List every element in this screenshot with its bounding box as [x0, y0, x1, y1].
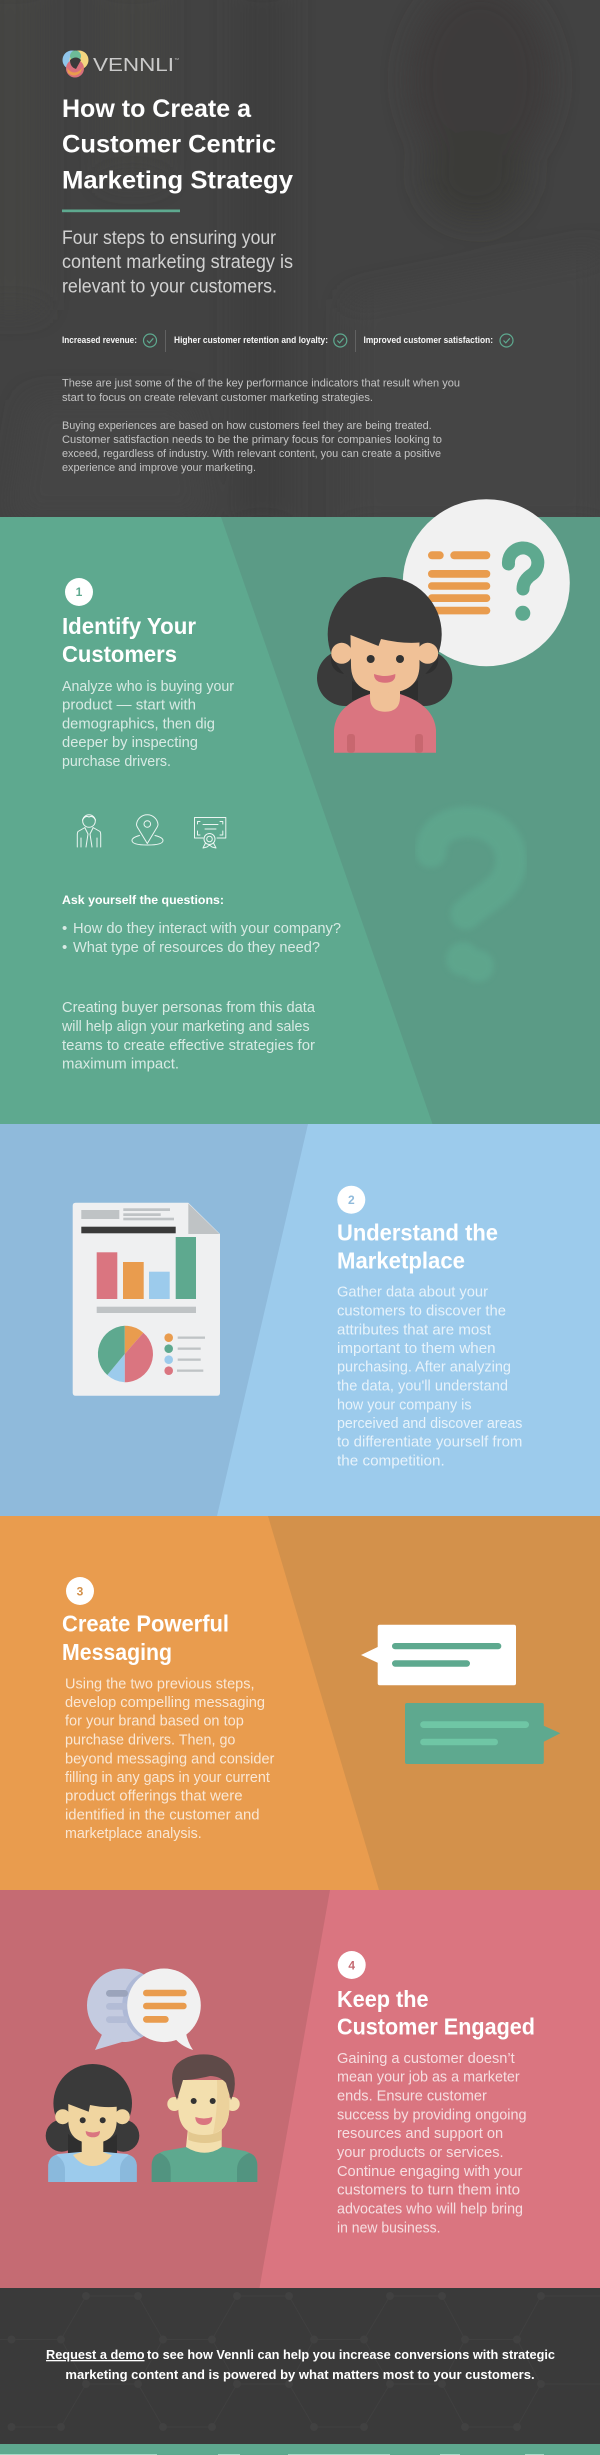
- text: step 2 description: perceived and discover areas: [337, 1415, 522, 1432]
- text: step 4 description: success by providing ongoing: [337, 2106, 527, 2124]
- icon: person: [77, 815, 101, 847]
- text: step 3 description: [65, 1675, 274, 1842]
- text: step 2 description: important to them when: [337, 1340, 496, 1357]
- text: ask yourself the questions: •: [62, 939, 67, 956]
- subtitle: [62, 228, 293, 298]
- KPI row: [62, 330, 513, 352]
- text: step 3 description: filling in any gaps in your current: [65, 1769, 271, 1786]
- text: step 2 description: to differentiate yourself from: [337, 1434, 522, 1451]
- title: Marketing Strategy: [62, 167, 293, 195]
- heading: identify your customers: [62, 613, 196, 667]
- text: step 1 description: purchase drivers.: [62, 753, 171, 770]
- logo: Vennli: VENNLI: [93, 55, 174, 75]
- illustration: back speech bubble: [87, 1968, 144, 2050]
- text: step 2 description: [337, 1284, 522, 1469]
- heading: create powerful messaging: Create Powerful: [62, 1611, 229, 1637]
- text: buyer personas: [61, 999, 316, 1073]
- heading: understand the marketplace: Understand the: [337, 1220, 498, 1246]
- text: step 1 description: product — start with: [62, 697, 196, 714]
- icon: ghost question mark: [431, 822, 511, 982]
- text: step 3 description: for your brand based on top: [65, 1713, 244, 1730]
- heading: identify your customers: Identify Your: [62, 613, 196, 639]
- subtitle: relevant to your customers.: [62, 277, 277, 298]
- intro text: Customer satisfaction needs to be the primary focus for companies looking to: [62, 434, 442, 446]
- call to action text: marketing content and is powered by what matters most to your customers.: [65, 2367, 535, 2382]
- text: step 2 description: the data, you'll understand: [337, 1377, 508, 1394]
- panel: step 4 keep the customer engaged: [0, 1890, 600, 2288]
- panel: step 2 understand the marketplace: [0, 1124, 600, 1516]
- intro text: experience and improve your marketing.: [62, 462, 256, 474]
- icon: check: [500, 334, 513, 347]
- icon: certificate: [194, 818, 226, 848]
- text: step 3 description: Using the two previous steps,: [65, 1675, 254, 1692]
- text: step 2 description: Gather data about your: [337, 1284, 488, 1301]
- step number 2: [337, 1186, 365, 1214]
- subtitle: Four steps to ensuring your: [62, 228, 277, 249]
- text: step 4 description: your products or services.: [337, 2144, 504, 2161]
- call to action text: Request a demo: [46, 2347, 145, 2362]
- text: step 3 description: develop compelling messaging: [65, 1694, 265, 1711]
- illustration: woman: [46, 2064, 139, 2182]
- heading: keep the customer engaged: Customer Engaged: [337, 2014, 535, 2040]
- text: ask yourself the questions: How do they interact with your company?: [73, 920, 341, 937]
- icon: check: [334, 334, 347, 347]
- text: ask yourself the questions: Ask yourself the questions:: [62, 893, 224, 907]
- panel: step 1 identify your customers: [0, 499, 600, 1124]
- icon: white chat bubble: [361, 1625, 516, 1685]
- title: How to Create a: [62, 95, 252, 123]
- illustration: front speech bubble: [127, 1968, 201, 2050]
- intro text: These are just some of the of the key performance indicators that result when you: [62, 378, 460, 390]
- call to action text: [46, 2347, 555, 2382]
- illustration: man: [152, 2054, 257, 2182]
- text: step 3 description: identified in the customer and: [65, 1806, 260, 1823]
- icon: green chat bubble: [405, 1703, 560, 1764]
- KPI row: Higher customer retention and loyalty:: [174, 335, 328, 346]
- intro text: start to focus on create relevant customer marketing strategies.: [62, 392, 373, 404]
- step number 4: 4: [348, 1958, 355, 1972]
- text: ask yourself the questions: What type of resources do they need?: [73, 939, 320, 956]
- text: step 2 description: attributes that are most: [337, 1321, 492, 1338]
- icon: speech bubble with question: [403, 499, 570, 666]
- step number 1: 1: [76, 585, 83, 599]
- text: step 4 description: [337, 2050, 527, 2236]
- text: step 4 description: customers to turn them into: [337, 2182, 520, 2198]
- text: buyer personas: will help align your marketing and sales: [61, 1018, 310, 1035]
- text: step 1 description: [62, 678, 234, 770]
- bar chart: [97, 1237, 196, 1299]
- text: step 4 description: resources and support on: [337, 2125, 503, 2142]
- step number 1: [65, 578, 93, 606]
- intro text: exceed, regardless of industry. With relevant content, you can create a positive: [62, 448, 441, 460]
- illustration: report document: [73, 1203, 220, 1396]
- text: buyer personas: maximum impact.: [62, 1056, 179, 1073]
- text: step 4 description: in new business.: [337, 2219, 440, 2236]
- call to action text: to see how Vennli can help you increase conversions with strategic: [147, 2347, 555, 2362]
- text: ask yourself the questions: •: [62, 920, 67, 937]
- subtitle: content marketing strategy is: [62, 252, 293, 273]
- text: step 1 description: demographics, then dig: [62, 716, 215, 733]
- text: step 3 description: beyond messaging and consider: [65, 1750, 274, 1767]
- text: step 1 description: deeper by inspecting: [62, 734, 198, 751]
- heading: identify your customers: Customers: [62, 641, 177, 667]
- step number 3: [66, 1577, 94, 1605]
- panel: header: [0, 0, 600, 530]
- legend: [164, 1333, 173, 1375]
- heading: create powerful messaging: [62, 1611, 229, 1665]
- bottom green strip: [0, 2444, 600, 2455]
- text: step 4 description: ends. Ensure customer: [337, 2088, 487, 2105]
- illustration: woman: [317, 577, 452, 753]
- text: step 4 description: Continue engaging with your: [337, 2163, 522, 2180]
- intro text: [62, 378, 460, 474]
- text: step 4 description: mean your job as a marketer: [337, 2069, 520, 2086]
- heading: understand the marketplace: [337, 1220, 498, 1274]
- pie chart: [98, 1326, 153, 1382]
- heading: understand the marketplace: Marketplace: [337, 1248, 465, 1274]
- text: step 2 description: purchasing. After analyzing: [337, 1359, 511, 1376]
- text: step 2 description: how your company is: [337, 1396, 472, 1413]
- text: step 3 description: purchase drivers. Then, go: [65, 1731, 235, 1748]
- title: [62, 95, 293, 195]
- KPI row: Increased revenue:: [62, 335, 137, 346]
- step number 3: 3: [77, 1584, 84, 1598]
- step number 2: 2: [348, 1193, 355, 1207]
- logo: Vennli: TM: [174, 57, 179, 61]
- text: step 3 description: product offerings that were: [65, 1788, 243, 1805]
- text: step 4 description: advocates who will help bring: [337, 2200, 523, 2217]
- logo: Vennli: [62, 50, 179, 78]
- panel: step 3 create powerful messaging: [0, 1516, 600, 1890]
- icon: check: [144, 334, 156, 347]
- title: Customer Centric: [62, 131, 276, 159]
- KPI row: Improved customer satisfaction:: [364, 335, 493, 346]
- text: buyer personas: Creating buyer personas from this data: [62, 999, 316, 1016]
- panel: call to action footer: [0, 2288, 600, 2444]
- heading: create powerful messaging: Messaging: [62, 1639, 172, 1665]
- step number 4: [338, 1951, 366, 1979]
- text: buyer personas: teams to create effective strategies for: [62, 1037, 315, 1054]
- text: ask yourself the questions: [62, 893, 341, 956]
- text: step 4 description: Gaining a customer doesn’t: [337, 2050, 516, 2067]
- heading: keep the customer engaged: Keep the: [337, 1986, 429, 2012]
- text: step 2 description: customers to discover the: [337, 1302, 506, 1319]
- heading: keep the customer engaged: [337, 1986, 535, 2040]
- text: step 3 description: marketplace analysis.: [65, 1825, 202, 1842]
- text: step 2 description: the competition.: [337, 1452, 445, 1469]
- text: step 1 description: Analyze who is buying your: [62, 678, 234, 695]
- icon: location pin: [132, 815, 163, 845]
- intro text: Buying experiences are based on how customers feel they are being treated.: [62, 420, 432, 432]
